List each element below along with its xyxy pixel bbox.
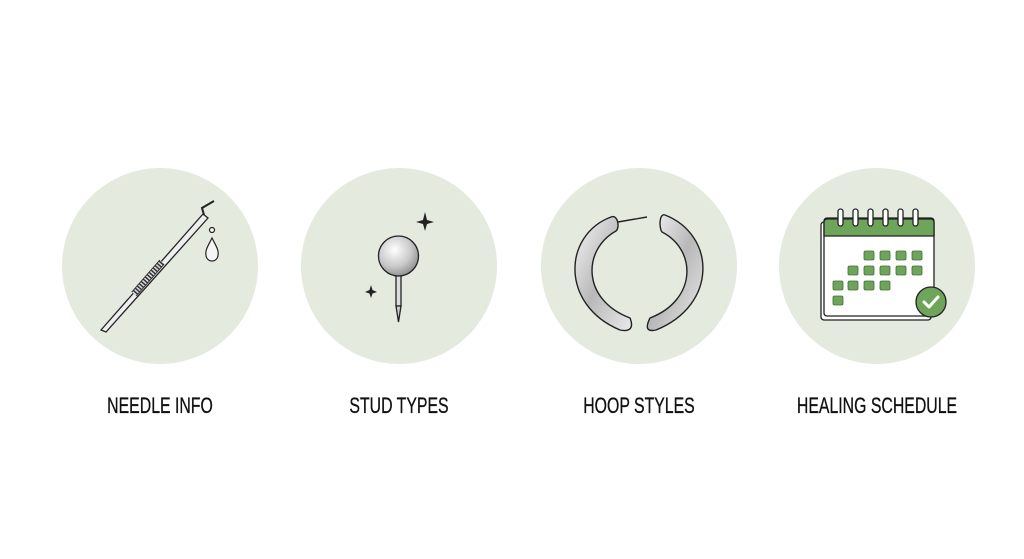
icon: stud xyxy=(378,236,418,322)
panel: hoop styles xyxy=(541,168,737,364)
label: hoop styles: HOOP STYLES xyxy=(583,393,695,418)
panel: healing schedule xyxy=(779,168,975,364)
panel: stud types xyxy=(301,168,497,364)
icon: sparkles xyxy=(365,212,434,298)
icon: calendar xyxy=(821,209,946,320)
label: stud types: STUD TYPES xyxy=(349,393,449,418)
icon: hoop xyxy=(575,215,703,330)
label: needle info: NEEDLE INFO xyxy=(107,393,213,418)
label: healing schedule: HEALING SCHEDULE xyxy=(797,393,957,418)
panel: needle info xyxy=(62,168,258,364)
icon: needle xyxy=(101,201,214,332)
icon: check badge xyxy=(916,287,946,317)
icon: water drop xyxy=(206,228,218,261)
